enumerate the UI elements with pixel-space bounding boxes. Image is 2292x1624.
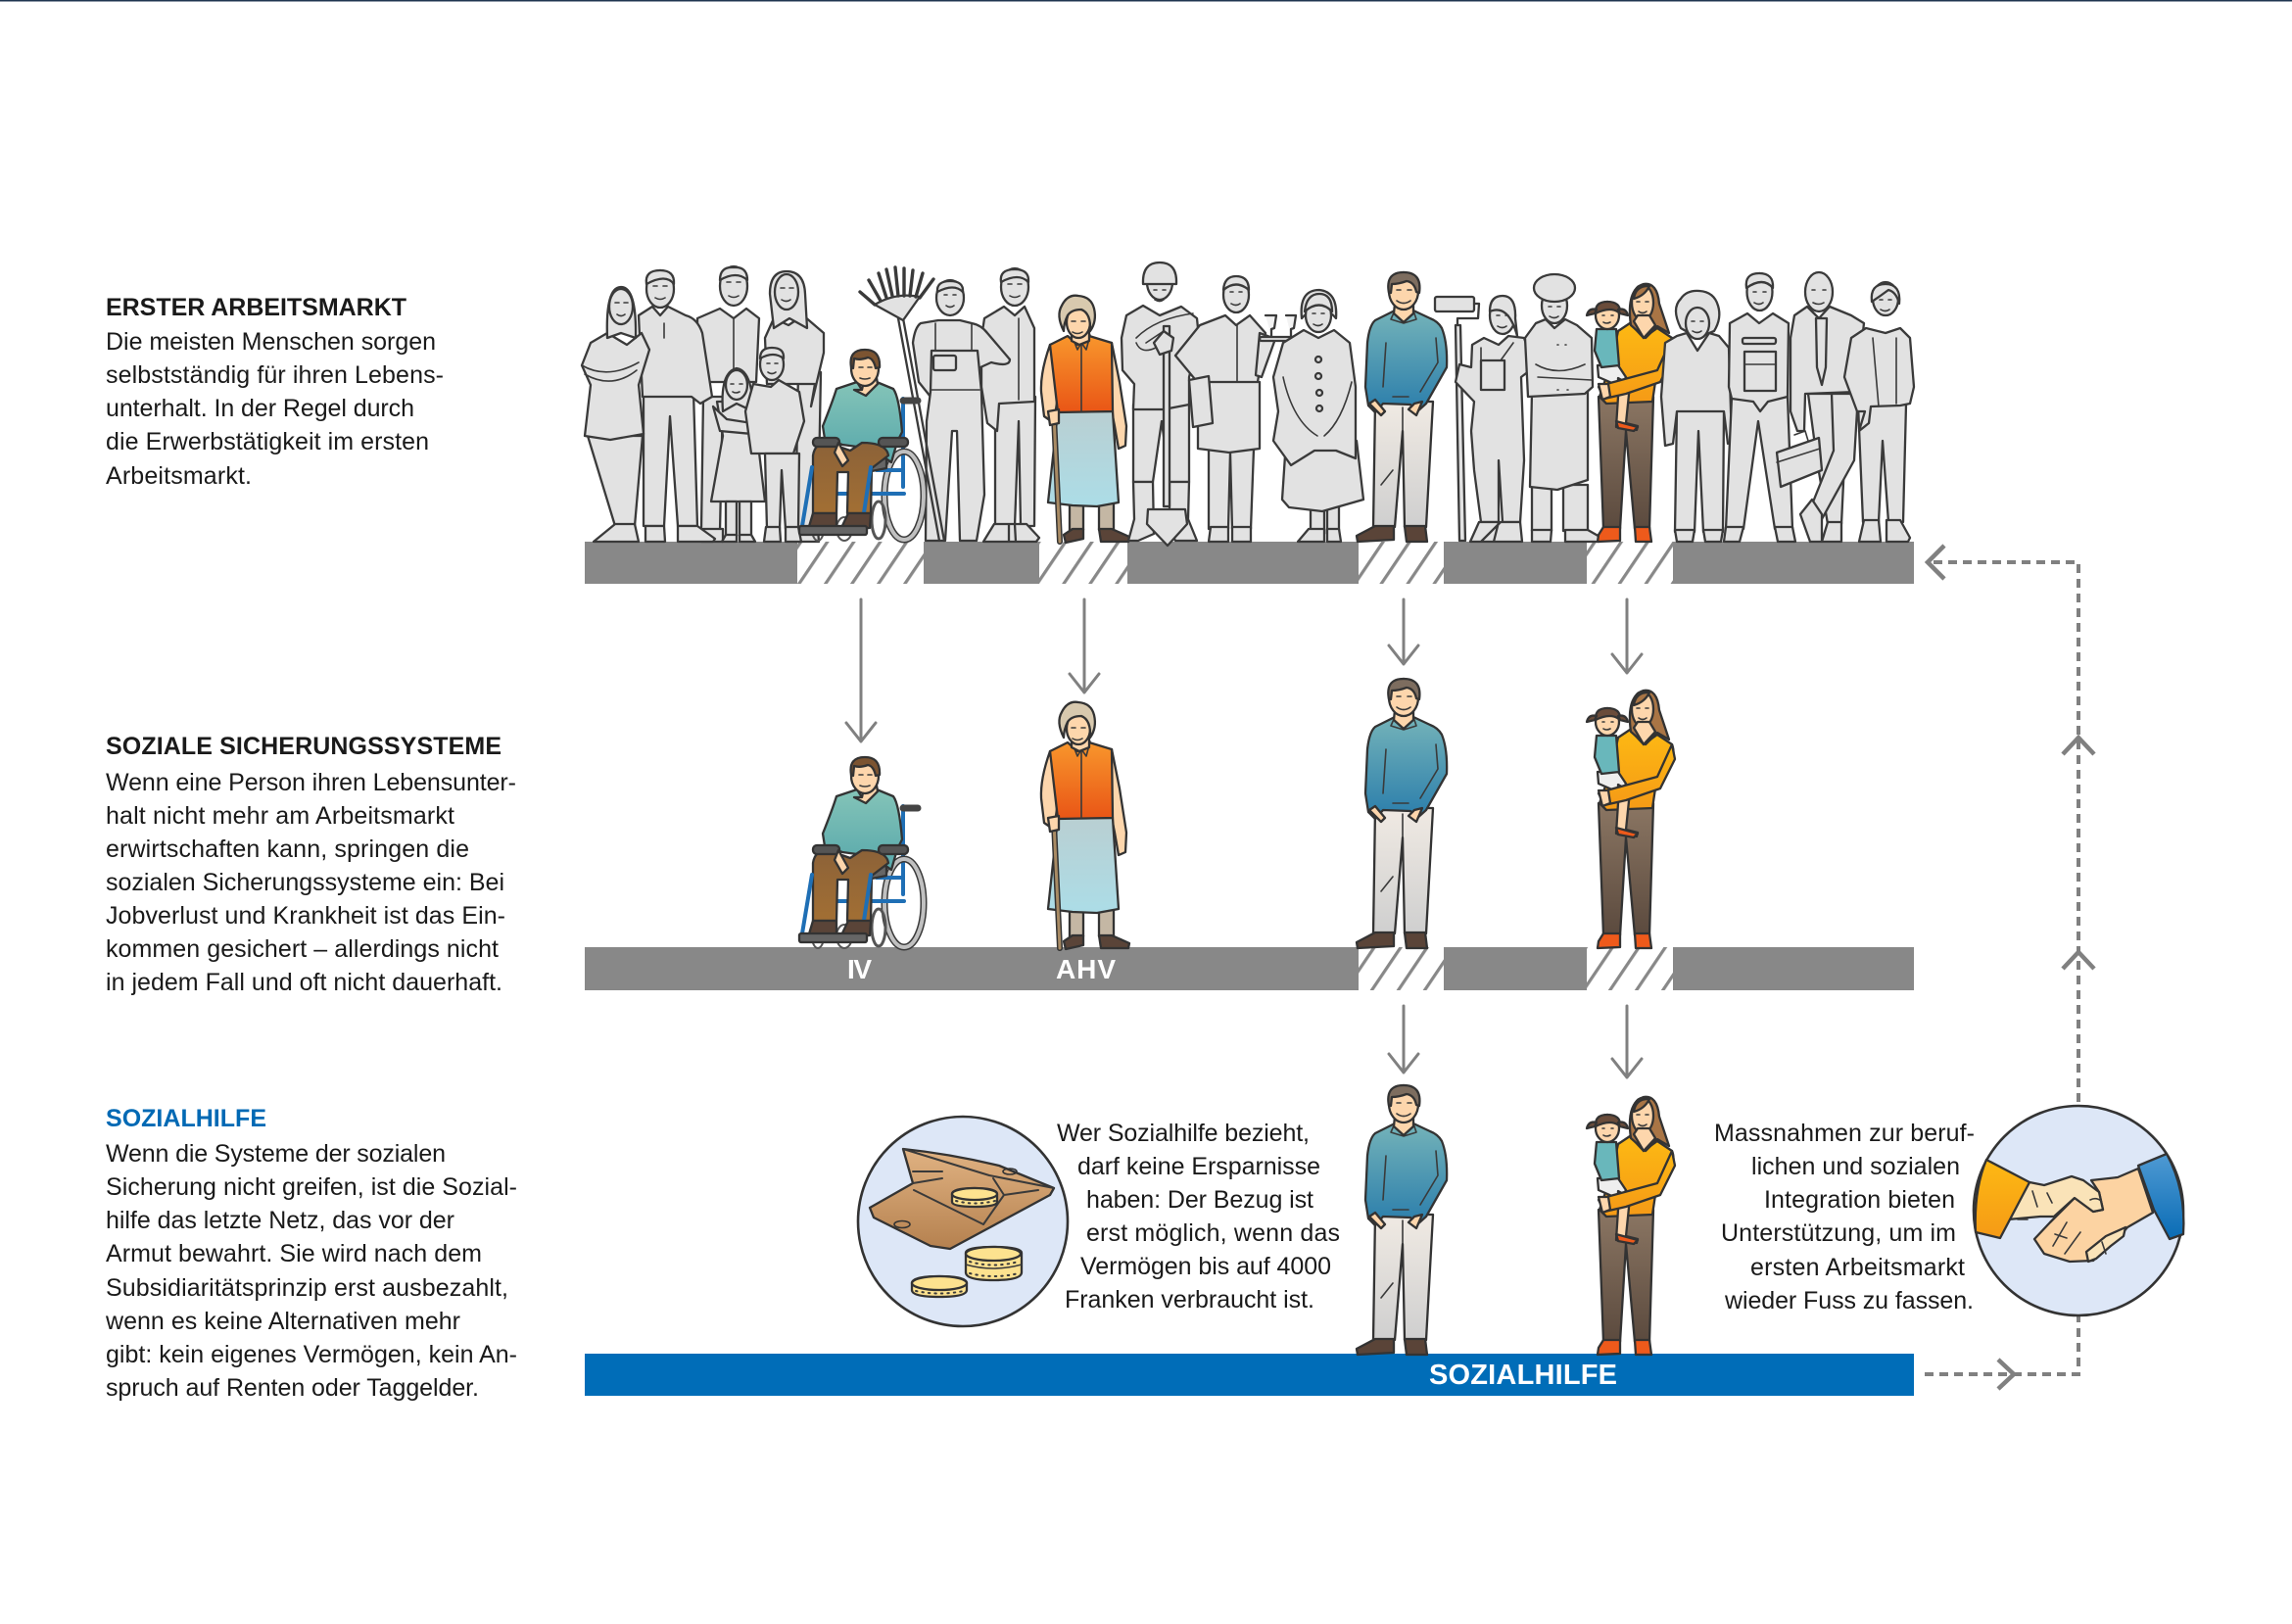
text block: Sozialhilfe: Sicherung nicht greifen, ist die Sozial- (106, 1173, 517, 1201)
bar: erster Arbeitsmarkt (585, 542, 1914, 584)
AHV old woman, social security row (1041, 702, 1129, 949)
man, welfare row (1357, 1085, 1447, 1355)
text block: Sozialhilfe: Armut bewahrt. Sie wird nach dem (106, 1240, 482, 1267)
callout: wallet text: haben: Der Bezug ist (1086, 1186, 1313, 1214)
grey person: man with jacket (981, 268, 1039, 542)
text block: Sozialhilfe: SOZIALHILFE (106, 1105, 266, 1132)
man in blue-teal sweater (1357, 272, 1447, 542)
bar: Sozialhilfe: SOZIALHILFE (1429, 1360, 1617, 1391)
text block: soziale Sicherungssysteme: SOZIALE SICHERUNGSSYSTEME (106, 733, 501, 760)
man, social security row (1357, 679, 1447, 948)
arrow: first market to mother (1612, 599, 1642, 673)
grey person: older woman with headscarf (1273, 290, 1363, 542)
text block: soziale Sicherungssysteme: erwirtschaften kann, springen die (106, 836, 469, 863)
text block: soziale Sicherungssysteme: in jedem Fall und oft nicht dauerhaft. (106, 969, 502, 996)
grey people: family group (582, 266, 824, 542)
icon: empty wallet and coins (858, 1117, 1068, 1326)
bar: Sozialhilfe (585, 1354, 1914, 1396)
top rule (0, 0, 2292, 2)
grey person: waitress with tray (1175, 276, 1313, 542)
grey person: chef (1525, 274, 1601, 542)
grey person: painter with roller (1435, 296, 1534, 542)
text block: erster Arbeitsmarkt: selbstständig für ihren Lebens- (106, 361, 444, 389)
callout: wallet text: erst möglich, wenn das (1086, 1219, 1340, 1247)
text block: Sozialhilfe: wenn es keine Alternativen mehr (105, 1308, 460, 1335)
callout: integration text: lichen und sozialen (1751, 1153, 1960, 1180)
bar: soziale Sicherungssysteme with IV and AHV labels (585, 947, 1914, 990)
arrow: first market to man (1389, 599, 1418, 664)
callout: wallet text: darf keine Ersparnisse (1077, 1153, 1320, 1180)
icon: handshake (1974, 1106, 2183, 1315)
text block: Sozialhilfe: spruch auf Renten oder Taggelder. (106, 1374, 479, 1402)
callout: wallet text: Franken verbraucht ist. (1065, 1286, 1314, 1314)
text block: Sozialhilfe: gibt: kein eigenes Vermögen, kein An- (106, 1341, 517, 1368)
callout: integration text: ersten Arbeitsmarkt (1750, 1254, 1965, 1281)
callout: integration text (1714, 1120, 1975, 1314)
arrow: social security to welfare, mother (1612, 1006, 1642, 1077)
arrow: first market to IV (846, 599, 876, 741)
mother with child on arm (1587, 284, 1675, 542)
callout: integration text: Integration bieten (1764, 1186, 1955, 1214)
text block: erster Arbeitsmarkt: ERSTER ARBEITSMARKT (106, 294, 406, 321)
arrow: social security to welfare, man (1389, 1006, 1418, 1073)
text block: Sozialhilfe: Subsidiaritätsprinzip erst ausbezahlt, (106, 1274, 508, 1302)
grey person: curly-haired woman (1661, 291, 1732, 542)
text block: soziale Sicherungssysteme: kommen gesichert – allerdings nicht (106, 935, 499, 963)
text block: soziale Sicherungssysteme: halt nicht mehr am Arbeitsmarkt (106, 802, 454, 830)
text block: Sozialhilfe: Wenn die Systeme der sozialen (106, 1140, 446, 1168)
callout: integration text: Massnahmen zur beruf- (1714, 1120, 1975, 1147)
callout: wallet text: Vermögen bis auf 4000 (1080, 1253, 1331, 1280)
grey person: man in protective vest (1724, 273, 1795, 542)
IV wheelchair man, social security row (799, 757, 924, 948)
text block: erster Arbeitsmarkt: unterhalt. In der Regel durch (106, 395, 414, 422)
text block: erster Arbeitsmarkt: die Erwerbstätigkeit im ersten (106, 428, 429, 455)
wheelchair man in teal sweater (IV) (799, 350, 924, 541)
old woman with cane in orange vest (AHV) (1041, 296, 1129, 543)
arrow: first market to AHV (1070, 599, 1099, 693)
text block: soziale Sicherungssysteme: Jobverlust und Krankheit ist das Ein- (106, 902, 505, 930)
grey person: woman in overalls with rake (860, 267, 1010, 541)
text block: soziale Sicherungssysteme: sozialen Sicherungssysteme ein: Bei (106, 869, 504, 896)
text block: Sozialhilfe (105, 1105, 517, 1402)
bar: soziale Sicherungssysteme with IV and AHV labels: IV (847, 954, 872, 984)
grey person: construction worker with shovel (1122, 263, 1199, 546)
text block: erster Arbeitsmarkt: Die meisten Menschen sorgen (106, 328, 436, 356)
callout: integration text: Unterstützung, um im (1721, 1219, 1956, 1247)
text block: erster Arbeitsmarkt (106, 294, 444, 490)
text block: soziale Sicherungssysteme: Wenn eine Person ihren Lebensunter- (106, 769, 516, 796)
mother with child, welfare row (1587, 1097, 1675, 1355)
dashed return arrows (1920, 546, 2094, 1389)
text block: Sozialhilfe: hilfe das letzte Netz, das vor der (106, 1207, 454, 1234)
grey person: man with tie and briefcase (1777, 272, 1864, 542)
text block: soziale Sicherungssysteme (106, 733, 516, 996)
callout: wallet text: Wer Sozialhilfe bezieht, (1057, 1120, 1310, 1147)
mother with child, social security row (1587, 691, 1675, 948)
text block: erster Arbeitsmarkt: Arbeitsmarkt. (106, 462, 252, 490)
callout: wallet text (1057, 1120, 1340, 1314)
grey person: woman in open jacket (1844, 282, 1914, 542)
bar: soziale Sicherungssysteme with IV and AHV labels: AHV (1056, 954, 1116, 984)
callout: integration text: wieder Fuss zu fassen. (1724, 1287, 1974, 1314)
